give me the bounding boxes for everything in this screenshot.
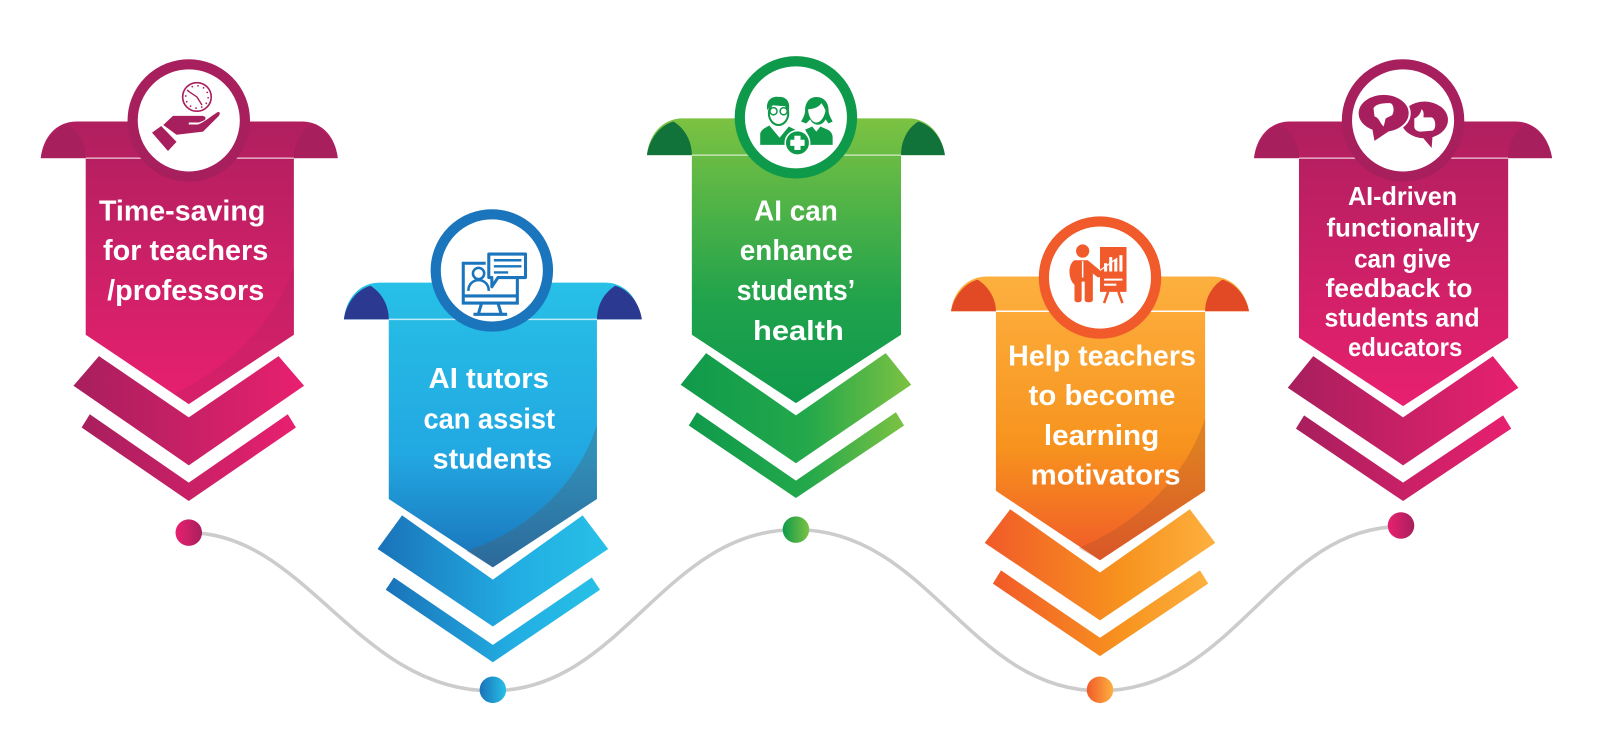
panel: AI-driven feedback (1254, 64, 1552, 501)
heading: AI-driven feedback (1324, 183, 1480, 362)
heading: AI tutors: students (433, 443, 552, 475)
heading: time-saving (99, 195, 268, 307)
heading: students' health (737, 195, 855, 346)
heading: AI-driven feedback: educators (1348, 334, 1462, 362)
icon: hand holding clock (133, 64, 245, 177)
heading: AI-driven feedback: students and (1324, 305, 1480, 333)
heading: learning motivators: to become (1029, 380, 1176, 412)
icon: students with plus (740, 61, 852, 173)
heading: students' health: enhance (740, 235, 853, 267)
heading: students' health: students’ (737, 275, 855, 307)
heading: AI tutors: AI tutors (429, 363, 549, 395)
panel: AI tutors (344, 214, 642, 662)
panel: students' health (647, 61, 945, 498)
icon: thumbs feedback bubbles (1347, 64, 1459, 177)
heading: AI-driven feedback: AI-driven (1348, 183, 1457, 211)
panel: time-saving (41, 64, 338, 501)
heading: AI-driven feedback: feedback to (1326, 275, 1472, 303)
heading: time-saving: /professors (107, 275, 264, 307)
heading: AI tutors (423, 363, 556, 475)
heading: learning motivators: Help teachers (1008, 340, 1196, 372)
timeline dots (176, 512, 1414, 703)
heading: students' health: health (753, 315, 844, 346)
connector curve (189, 527, 1401, 691)
heading: learning motivators (1008, 340, 1196, 492)
heading: AI tutors: can assist (423, 404, 556, 436)
icon: online tutor monitor (436, 214, 548, 327)
heading: students' health: AI can (754, 195, 838, 227)
heading: AI-driven feedback: can give (1354, 245, 1451, 273)
heading: learning motivators: learning (1044, 420, 1159, 452)
heading: learning motivators: motivators (1031, 460, 1181, 492)
icon: presenter with chart (1044, 221, 1156, 334)
heading: AI-driven feedback: functionality (1327, 215, 1480, 243)
heading: time-saving: for teachers (103, 235, 268, 267)
heading: time-saving: Time-saving (99, 195, 265, 227)
panel: learning motivators (951, 221, 1249, 656)
